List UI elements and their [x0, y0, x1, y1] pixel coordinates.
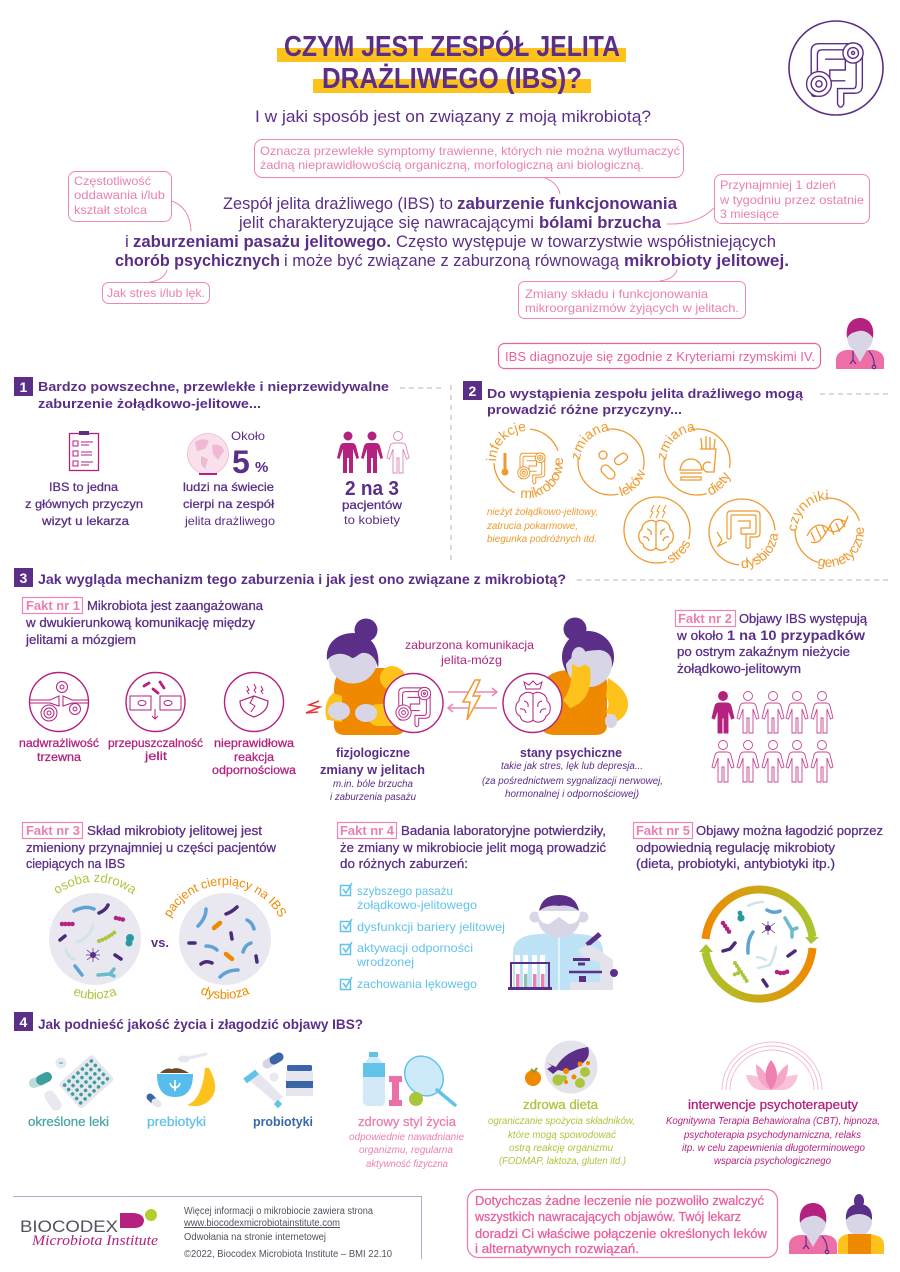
heading 3: Jak wygląda mechanizm tego zaburzenia i jak jest ono związane z mikrobiotą? — [38, 572, 566, 587]
callout: microbiota changes: Zmiany składu i funkcjonowania — [525, 287, 708, 301]
callout: stool frequency: oddawania i/lub — [74, 188, 165, 202]
icon: gut in circle — [789, 21, 883, 115]
label: healthy diet: ostrą reakcję organizmu — [509, 1143, 613, 1154]
panel 4: quality of life — [14, 1012, 880, 1170]
stat: doctor visits: IBS to jedna — [49, 480, 118, 494]
icon: microbial infection — [486, 422, 564, 498]
checklist: wrodzonej — [356, 955, 414, 969]
callout: Rome IV criteria — [498, 344, 820, 368]
label: psychological states: takie jak stres, lęk lub depresja... — [501, 761, 643, 772]
label: physiological changes: i zaburzenia pasażu — [330, 792, 416, 803]
stat: 5 percent: % — [255, 459, 268, 476]
chart: microbiota regulation cycle — [699, 890, 819, 999]
fact 2: Fakt nr 2 — [678, 612, 732, 626]
icon: dysbiosis — [708, 498, 778, 570]
main definition text: i — [125, 232, 129, 251]
section badge 3: 3 — [20, 570, 28, 586]
label: disturbed gut-brain communication: zaburzona komunikacja — [405, 638, 534, 652]
icon: medication change: zmiana — [572, 424, 610, 460]
section badge 2: 2 — [468, 383, 476, 399]
stat: 2 in 3: 2 na 3 — [345, 478, 399, 500]
fact 2: Objawy IBS występują — [739, 612, 867, 626]
stat: doctor visits — [25, 480, 143, 528]
stat: 5 percent: ludzi na świecie — [183, 480, 274, 494]
label: healthy lifestyle: zdrowy styl życia — [358, 1115, 456, 1129]
callout: duration: 3 miesiące — [720, 207, 779, 221]
icon: healthy lifestyle — [363, 1048, 455, 1106]
stat: 2 in 3 — [342, 478, 402, 527]
icon: doctor — [836, 318, 884, 369]
icon: healthy diet — [525, 1040, 598, 1094]
label: psychotherapy: psychoterapia psychodynamiczna, relaks — [683, 1130, 861, 1141]
label: physiological changes: m.in. bóle brzucha — [333, 779, 413, 790]
main definition text: Zespół jelita drażliwego (IBS) to — [223, 194, 453, 213]
main definition text: mikrobioty jelitowej. — [624, 251, 789, 270]
section badge 4 — [14, 1012, 33, 1031]
callout: stool frequency: kształt stolca — [74, 203, 147, 217]
icon: visceral hypersensitivity — [30, 672, 88, 732]
heading 1: Bardzo powszechne, przewlekłe i nieprzewidywalne — [38, 379, 389, 394]
callout: Rome IV criteria: IBS diagnozuje się zgodnie z Kryteriami rzymskimi IV. — [505, 350, 815, 364]
fact 5: (dieta, probiotyki, antybiotyki itp.) — [636, 857, 835, 871]
stat: 2 in 3: to kobiety — [344, 513, 400, 527]
icon: diet change — [658, 424, 731, 496]
panel 1: prevalence — [14, 377, 441, 528]
callout: microbiota changes — [518, 270, 746, 318]
callout: duration: w tygodniu przez ostatnie — [719, 193, 864, 207]
icon: medicines — [34, 1054, 114, 1109]
section badge 2 — [463, 381, 482, 400]
chart: IBS microbiota (dysbiosis): dysbioza — [201, 986, 250, 1000]
icon: lotus — [722, 1042, 822, 1090]
fact 4 — [338, 822, 606, 871]
heading 1 — [38, 379, 389, 411]
label: healthy diet — [488, 1098, 635, 1167]
label: healthy diet: które mogą spowodować — [508, 1130, 616, 1141]
labels: microbiota mechanisms — [19, 736, 296, 777]
label: healthy lifestyle: aktywność fizyczna — [366, 1159, 448, 1170]
illustration: woman with psychological states — [503, 618, 628, 735]
icon: doctor and patient — [789, 1194, 884, 1254]
subtitle: I w jaki sposób jest on związany z moją mikrobiotą? — [255, 107, 651, 126]
label: healthy lifestyle: odpowiednie nawadnianie — [349, 1132, 464, 1143]
footer text: Więcej informacji o mikrobiocie zawiera strona — [184, 1206, 373, 1217]
label: psychotherapy: wsparcia psychologicznego — [714, 1156, 831, 1167]
logo: Biocodex Microbiota Institute: BIOCODEX — [20, 1217, 118, 1236]
label: probiotics: probiotyki — [253, 1115, 313, 1129]
fact 1 — [22, 598, 263, 647]
logo: Biocodex Microbiota Institute — [20, 1209, 158, 1249]
main definition text: zaburzeniami pasażu jelitowego. — [133, 232, 391, 251]
chart: healthy microbiota (eubiosis): eubioza — [74, 989, 118, 999]
label: healthy diet: ograniczanie spożycia składników, — [488, 1116, 635, 1127]
icon: lightning — [463, 680, 480, 720]
labels: microbiota mechanisms: przepuszczalność — [108, 736, 203, 750]
fact 4: Badania laboratoryjne potwierdziły, — [401, 824, 606, 838]
fact 2: w około — [676, 629, 723, 643]
fact 5: Objawy można łagodzić poprzez — [696, 824, 883, 838]
icon: medication change — [572, 424, 645, 496]
icon: globe — [188, 434, 228, 474]
checklist: dysfunkcji bariery jelitowej — [357, 920, 505, 934]
label: disturbed gut-brain communication — [405, 638, 534, 667]
examples text: biegunka podróżnych itd. — [487, 533, 597, 545]
labels: microbiota mechanisms: jelit — [144, 749, 168, 763]
callout: duration — [667, 174, 870, 224]
stat: 5 percent: jelita drażliwego — [184, 514, 275, 528]
footer text: ©2022, Biocodex Microbiota Institute – BMI 22.10 — [184, 1249, 392, 1260]
fact 3: zmieniony przynajmniej u części pacjentów — [26, 841, 277, 855]
section badge 1 — [14, 377, 33, 396]
checklist: żołądkowo-jelitowego — [357, 898, 477, 912]
callout: symptoms definition — [254, 140, 684, 194]
callout: microbiota changes: mikroorganizmów żyjących w jelitach. — [525, 301, 739, 315]
footer text: Odwołania na stronie internetowej — [184, 1232, 326, 1243]
label: versus: vs. — [151, 936, 169, 950]
callout: final advice: wszystkich nawracających objawów. Twój lekarz — [474, 1210, 741, 1224]
footer — [13, 1190, 884, 1260]
label: physiological changes — [320, 745, 425, 803]
examples text — [486, 506, 598, 545]
callout: symptoms definition: Oznacza przewlekłe symptomy trawienne, których nie można wytłumaczyć — [260, 144, 680, 158]
main definition text: jelit charakteryzujące się nawracającymi — [238, 213, 534, 232]
callout: final advice — [468, 1190, 778, 1258]
icon: prebiotics — [150, 1054, 215, 1106]
icon: clipboard — [70, 431, 98, 470]
icon: diet change: diety — [708, 472, 731, 495]
examples text: zatrucia pokarmowe, — [486, 520, 578, 532]
fact 3: Skład mikrobioty jelitowej jest — [87, 824, 263, 838]
label: specific medicines: określone leki — [28, 1115, 109, 1129]
label: healthy lifestyle — [349, 1115, 464, 1170]
icon: abnormal immune response — [224, 672, 284, 732]
callout: final advice: Dotychczas żadne leczenie nie pozwoliło zwalczyć — [475, 1194, 764, 1208]
heading 2: prowadzić różne przyczyny... — [487, 402, 682, 417]
label: prebiotics: prebiotyki — [147, 1115, 206, 1129]
panel 2: causes — [463, 381, 888, 570]
main definition text: Często występuje w towarzystwie współistniejących — [396, 232, 776, 251]
icon: diet change: zmiana — [658, 424, 696, 460]
chart: healthy microbiota (eubiosis) — [49, 874, 141, 999]
fact 4: Fakt nr 4 — [340, 824, 394, 838]
icon: genetic factors: genetyczne — [818, 528, 864, 570]
main definition text — [115, 194, 789, 270]
checklist: aktywacji odporności — [357, 941, 473, 955]
fact 2 — [676, 610, 867, 676]
fact 2: żołądkowo-jelitowym — [677, 662, 801, 676]
main definition text: zaburzenie funkcjonowania — [457, 194, 678, 213]
section badge 3 — [14, 568, 33, 587]
stat: 2 in 3: pacjentów — [342, 498, 402, 512]
checklist: zachowania lękowego — [357, 977, 477, 991]
icon: genetic factors — [790, 490, 864, 570]
fact 4: do różnych zaburzeń: — [340, 857, 468, 871]
label: psychotherapy — [666, 1098, 880, 1167]
footer text: www.biocodexmicrobiotainstitute.com — [183, 1218, 340, 1229]
stat: 5 percent: 5 — [232, 444, 250, 480]
main definition text: i może być związane z zaburzoną równowagą — [284, 251, 620, 270]
examples text: nieżyt żołądkowo-jelitowy, — [487, 506, 598, 518]
title: CZYM JEST ZESPÓŁ JELITA — [284, 29, 620, 63]
fact 1: jelitami a mózgiem — [25, 633, 136, 647]
label: healthy lifestyle: organizmu, regularna — [359, 1145, 453, 1156]
label: healthy diet: zdrowa dieta — [523, 1098, 598, 1112]
icon: dysbiosis: dysbioza — [742, 534, 778, 570]
checklist — [340, 883, 505, 991]
callout: duration: Przynajmniej 1 dzień — [720, 178, 836, 192]
heading 4: Jak podnieść jakość życia i złagodzić objawy IBS? — [38, 1017, 363, 1032]
fact 5: Fakt nr 5 — [636, 824, 690, 838]
arrows: two-way communication — [448, 688, 497, 712]
icon: stress: stres — [668, 540, 690, 563]
title — [277, 29, 626, 95]
stat: doctor visits: z głównych przyczyn — [25, 497, 143, 511]
section badge 4: 4 — [20, 1014, 28, 1030]
stat: doctor visits: wizyt u lekarza — [41, 514, 129, 528]
title: DRAŻLIWEGO (IBS)? — [322, 63, 582, 95]
icon: microbial infection: infekcje — [486, 422, 526, 461]
chart: healthy microbiota (eubiosis): osoba zdrowa — [54, 874, 136, 894]
label: psychotherapy: itp. w celu zapewnienia długoterminowego — [682, 1143, 865, 1154]
callout: stress: Jak stres i/lub lęk. — [107, 286, 205, 300]
label: psychotherapy: Kognitywna Terapia Behawioralna (CBT), hipnoza, — [666, 1116, 880, 1127]
fact 1: w dwukierunkową komunikację między — [25, 616, 256, 630]
labels: microbiota mechanisms: odpornościowa — [212, 763, 296, 777]
fact 3: ciepiących na IBS — [26, 857, 125, 871]
icon: intestinal permeability — [126, 672, 185, 732]
fact 2: po ostrym zakaźnym nieżycie — [677, 645, 850, 659]
icon: genetic factors: czynniki — [790, 490, 828, 531]
stat: 5 percent: Około — [231, 429, 265, 443]
label: psychological states: hormonalnej i odpornościowej) — [505, 789, 639, 800]
section badge 1: 1 — [20, 379, 28, 395]
fact 3: Fakt nr 3 — [26, 824, 80, 838]
checklist: szybszego pasażu — [357, 884, 453, 898]
stat: 5 percent: cierpi na zespół — [183, 497, 274, 511]
label: psychological states — [482, 745, 663, 800]
fact 5: odpowiednią regulację mikrobioty — [636, 841, 836, 855]
labels: microbiota mechanisms: nieprawidłowa — [214, 736, 294, 750]
label: psychotherapy: interwencje psychoterapeuty — [688, 1098, 859, 1112]
icon: stress — [623, 496, 691, 564]
heading 2 — [487, 386, 804, 417]
label: healthy diet: (FODMAP, laktoza, gluten itd.) — [499, 1156, 626, 1167]
pictogram: 1 in 10 people — [712, 692, 833, 782]
callout: final advice: i alternatywnych rozwiązań. — [475, 1242, 639, 1256]
callout: symptoms definition: żadną nieprawidłowością organiczną, morfologiczną ani biologiczną. — [260, 158, 644, 172]
main definition text: chorób psychicznych — [115, 251, 280, 270]
callout: stool frequency — [68, 172, 191, 231]
icon: three people — [337, 432, 409, 473]
heading 2: Do wystąpienia zespołu jelita drażliwego mogą — [487, 386, 804, 401]
callout: final advice: doradzi Ci właściwe połączenie określonych leków — [475, 1227, 768, 1241]
fact 3 — [22, 822, 277, 871]
labels: microbiota mechanisms: trzewna — [37, 750, 81, 764]
illustration: scientist with microscope — [508, 895, 618, 990]
label: physiological changes: zmiany w jelitach — [320, 762, 425, 777]
main definition text: bólami brzucha — [539, 213, 662, 232]
fact 1: Fakt nr 1 — [26, 599, 80, 613]
footer text — [183, 1206, 392, 1260]
fact 4: że zmiany w mikrobiocie jelit mogą prowadzić — [340, 841, 606, 855]
panel 3: mechanism — [14, 568, 888, 1003]
labels: microbiota mechanisms: nadwrażliwość — [19, 736, 99, 750]
illustration: woman with gut pain — [306, 618, 443, 735]
fact 1: Mikrobiota jest zaangażowana — [87, 599, 263, 613]
icon: medication change: leków — [618, 469, 645, 496]
icon: probiotics — [245, 1057, 313, 1108]
callout: stool frequency: Częstotliwość — [74, 174, 151, 188]
icon: microbial infection: mikrobowe — [521, 458, 564, 498]
stat: 5 percent — [183, 429, 275, 528]
chart: IBS microbiota (dysbiosis): pacjent cierpiący na IBS — [164, 876, 286, 919]
label: physiological changes: fizjologiczne — [336, 745, 410, 760]
heading 1: zaburzenie żołądkowo-jelitowe... — [38, 396, 261, 411]
label: disturbed gut-brain communication: jelita-mózg — [440, 653, 502, 667]
fact 5 — [634, 822, 883, 871]
chart: IBS microbiota (dysbiosis) — [164, 876, 286, 1000]
label: psychological states: (za pośrednictwem sygnalizacji nerwowej, — [482, 776, 663, 787]
callout: stress — [102, 270, 210, 304]
logo: Biocodex Microbiota Institute: Microbiota Institute — [31, 1233, 158, 1249]
labels: microbiota mechanisms: reakcja — [234, 750, 274, 764]
fact 2: 1 na 10 przypadków — [727, 628, 866, 643]
label: psychological states: stany psychiczne — [520, 745, 622, 760]
